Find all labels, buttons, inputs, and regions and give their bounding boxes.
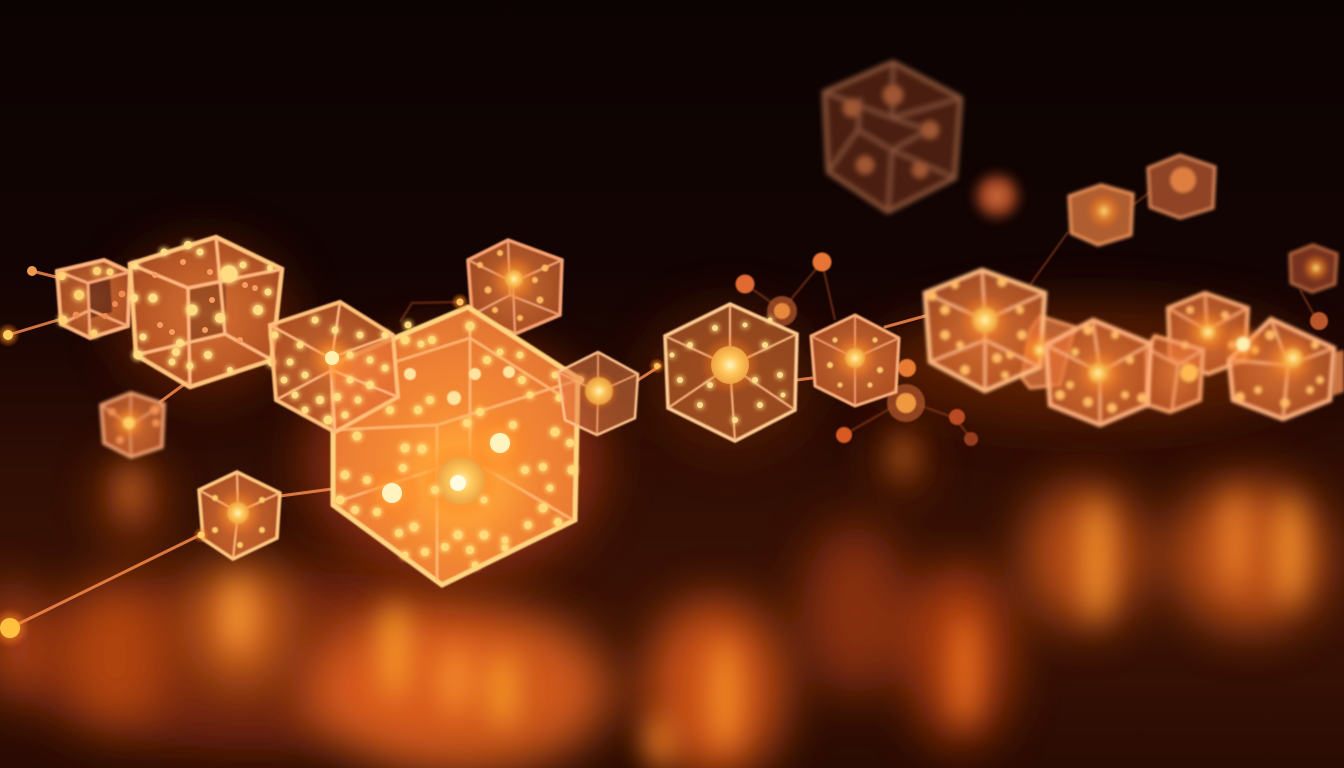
cube: centre left [270, 302, 398, 432]
cube: lower left [199, 472, 280, 559]
blurred background cube [824, 62, 961, 212]
cube: right large [925, 270, 1060, 391]
background nodes [736, 252, 1328, 446]
cube: large upper left [130, 237, 282, 387]
cube: far right front [1221, 319, 1334, 419]
ambient glow behind cubes [115, 242, 1310, 580]
cube: small beside hero [558, 352, 638, 435]
cube: right group back [1022, 293, 1344, 412]
cube: hero centre [333, 307, 584, 585]
cube: top centre [468, 240, 562, 334]
floor reflections [0, 428, 1330, 768]
cube: middle [665, 304, 797, 441]
connector lines [8, 271, 925, 628]
cube cluster: far right upper [1069, 155, 1337, 292]
cube: far left [57, 260, 130, 338]
cube: right front [1046, 320, 1151, 425]
cube: middle right small [811, 315, 899, 406]
cube: small left [101, 393, 164, 457]
glowing line endpoints [0, 266, 665, 648]
blurred orb [976, 175, 1018, 217]
